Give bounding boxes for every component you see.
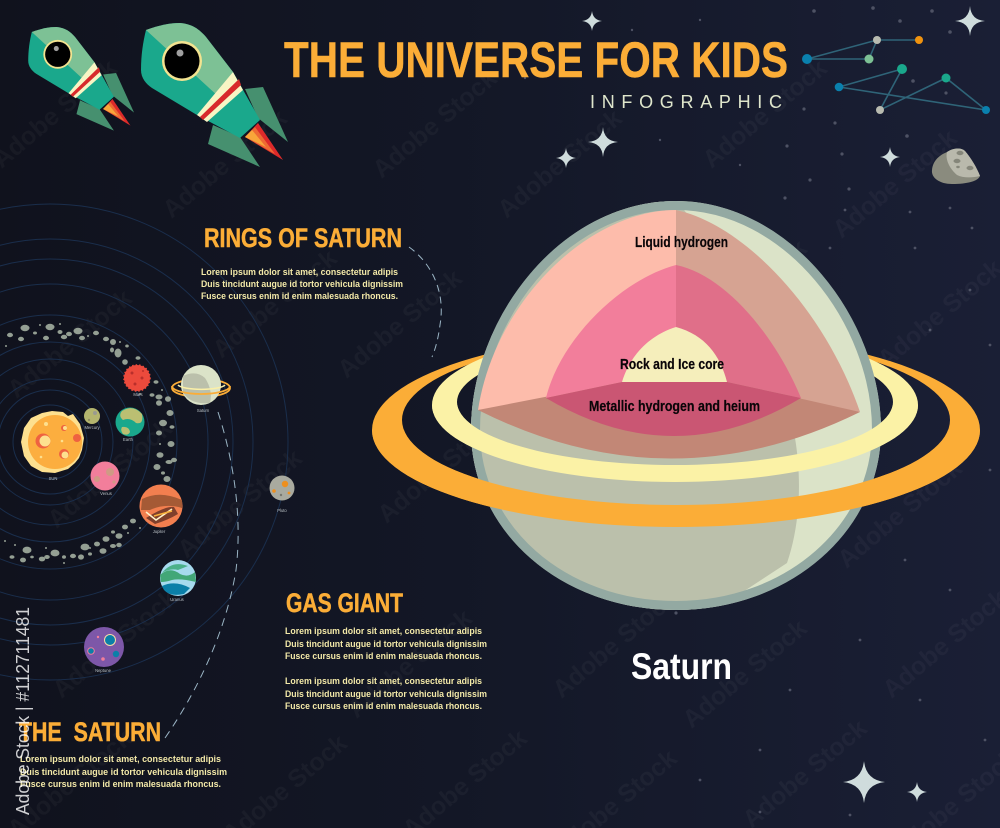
small saturn [172,365,230,413]
watermark: Adobe Stock [697,54,832,174]
dashed line: saturn to the saturn text [165,412,238,738]
earth [116,408,144,442]
watermark: Adobe Stock [502,254,637,374]
planet body [460,200,881,620]
sun: SUN [49,476,57,481]
text: the saturn [20,753,227,789]
watermark: Adobe Stock [2,284,137,404]
label: liquid hydrogen: Liquid hydrogen [635,234,728,251]
watermark: Adobe Stock [707,414,842,534]
text: gas giant: Duis tincidunt augue id tortor vehicula dignissim [285,688,487,699]
text: rings of saturn [201,266,403,301]
mercury: Mercury [84,425,100,430]
text: gas giant: Lorem ipsum dolor sit amet, consectetur adipis [285,625,482,636]
text: rings of saturn: Lorem ipsum dolor sit amet, consectetur adipis [201,266,398,277]
small saturn: Saturn [197,408,210,413]
text: gas giant [285,625,487,711]
text: gas giant: Duis tincidunt augue id tortor vehicula dignissim [285,638,487,649]
cutaway middle layer: metallic hydrogen [546,265,801,436]
subtitle: INFOGRAPHIC [590,92,782,112]
star specks [524,6,991,816]
watermark: Adobe Stock [832,454,967,574]
uranus: Uranus [170,597,184,602]
heading: the saturn: THE SATURN [19,717,161,747]
watermark: Adobe Stock [677,234,812,354]
uranus [160,560,196,602]
core [622,327,727,382]
neptune: Neptune [95,668,112,673]
label: rock and ice core: Rock and Ice core [620,356,724,373]
mars [124,365,150,397]
watermark: Adobe Stock [172,444,307,564]
neptune [84,627,124,673]
watermark: Adobe Stock [827,124,962,244]
heading: rings of saturn: RINGS OF SATURN [204,223,402,253]
mercury [84,408,100,430]
watermark: Adobe Stock [207,244,342,364]
pluto: Pluto [277,508,287,513]
title: THE UNIVERSE FOR KIDS [284,32,788,88]
text: gas giant: Fusce cursus enim id enim malesuada rhoncus. [285,650,482,661]
watermark: Adobe Stock [677,614,812,734]
watermark: Adobe Stock [47,584,182,704]
watermark: Adobe Stock [157,104,292,224]
label: metallic hydrogen: Metallic hydrogen and heium [589,398,760,415]
watermark: Adobe Stock [367,64,502,184]
rings back [372,328,980,527]
rocket small [28,27,134,131]
text: gas giant: Fusce cursus enim id enim malesuada rhoncus. [285,700,482,711]
pluto [270,476,294,513]
jupiter: Jupiter [153,529,166,534]
text: gas giant: Lorem ipsum dolor sit amet, consectetur adipis [285,675,482,686]
text: the saturn: Lorem ipsum dolor sit amet, consectetur adipis [20,753,221,764]
asteroid belt [4,323,177,564]
watermark: Adobe Stock [547,584,682,704]
text: the saturn: Duis tincidunt augue id tortor vehicula dignissim [20,766,227,777]
stars [556,6,985,803]
watermark: Adobe Stock [372,409,507,529]
solar system orbits [0,204,288,680]
constellations [802,36,990,114]
rings front [372,405,980,527]
watermark: Adobe Stock [492,104,627,224]
heading: gas giant: GAS GIANT [286,588,403,618]
text: rings of saturn: Duis tincidunt augue id tortor vehicula dignissim [201,278,403,289]
watermark: Adobe Stock [527,414,662,534]
dashed line: rings of saturn [409,247,441,357]
cutaway outer layer: liquid hydrogen [478,210,860,459]
asteroid [932,148,980,184]
caption: saturn: Saturn [631,646,732,687]
jupiter [140,484,182,534]
venus [90,462,120,496]
large saturn diagram [372,200,980,620]
text: rings of saturn: Fusce cursus enim id enim malesuada rhoncus. [201,290,398,301]
watermark: Adobe Stock [42,414,177,534]
earth: Earth [123,437,134,442]
venus: Venus [100,491,112,496]
mars: Mars [133,392,143,397]
stock id: Adobe Stock | #112711481 [13,607,33,815]
text: the saturn: Fusce cursus enim id enim malesuada rhoncus. [20,778,221,789]
sun [21,411,84,481]
watermark: Adobe Stock [332,264,467,384]
rocket large [141,23,288,167]
watermark: Adobe Stock [342,604,477,724]
